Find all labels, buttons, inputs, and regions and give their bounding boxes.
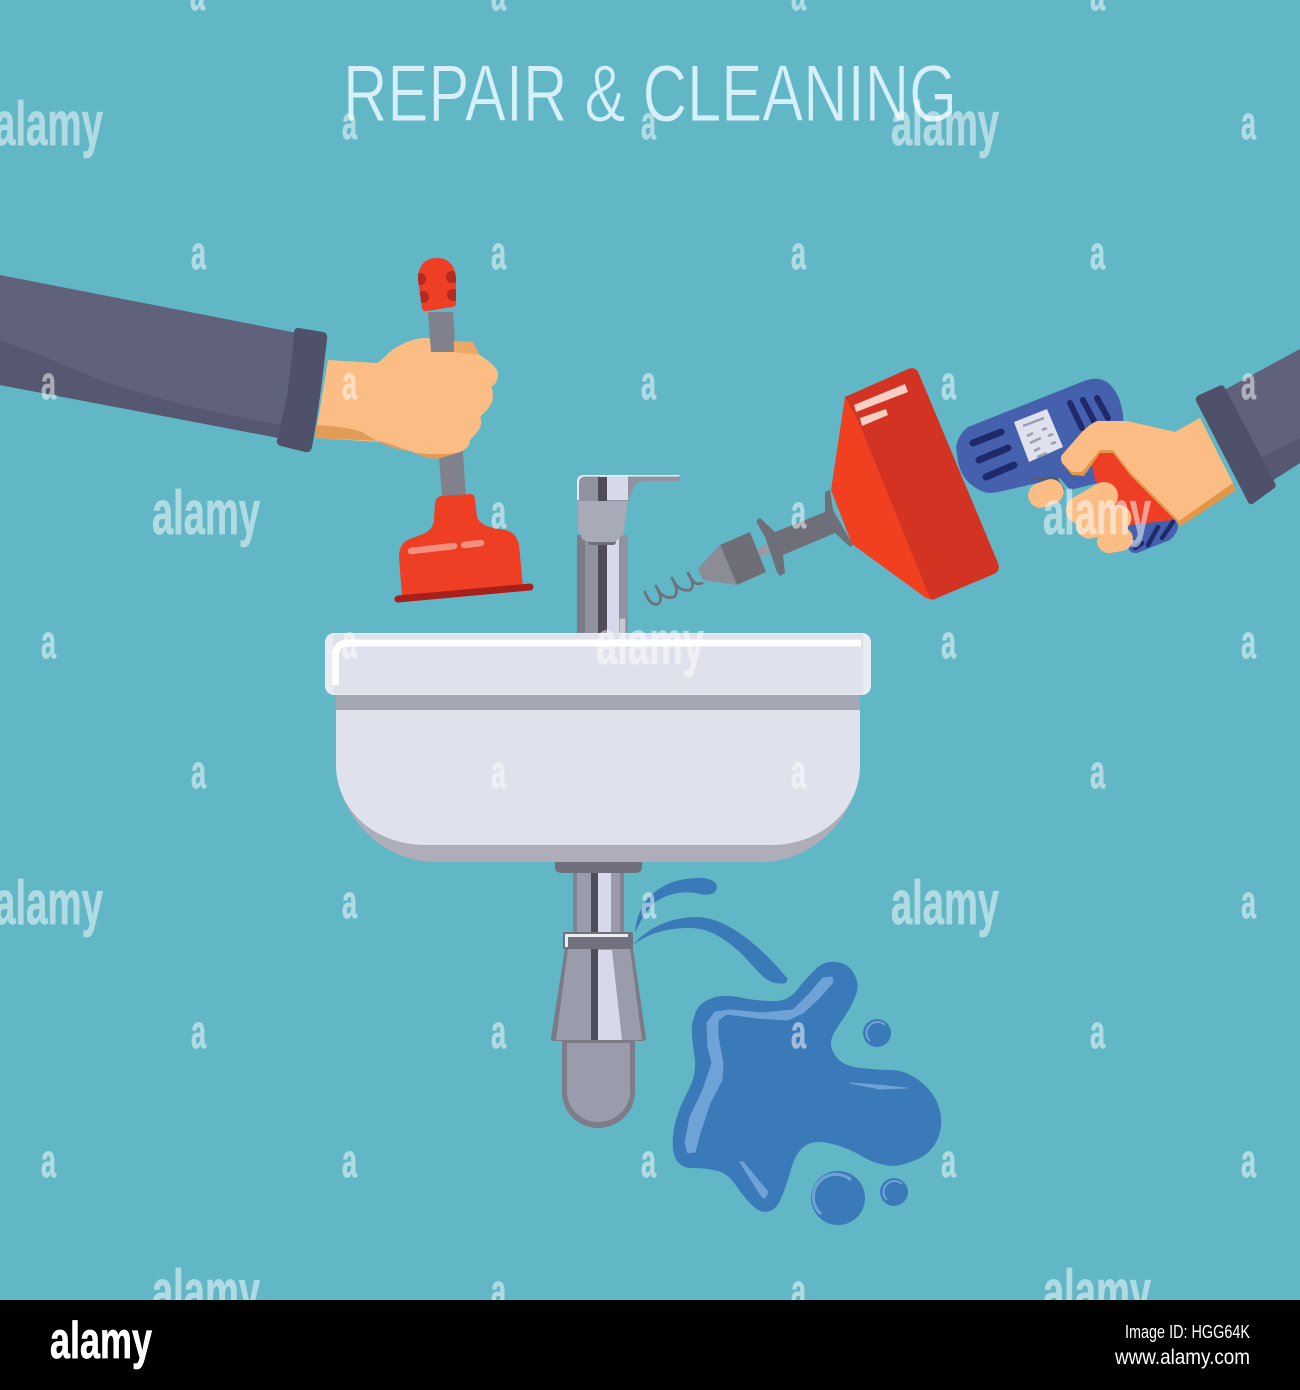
puddle highlights bbox=[685, 977, 907, 1198]
watermarks: a bbox=[641, 1134, 656, 1187]
drill vents bbox=[973, 398, 1108, 477]
watermarks: a bbox=[641, 96, 656, 149]
watermarks: a bbox=[791, 1005, 806, 1058]
watermarks: a bbox=[1241, 1134, 1256, 1187]
drain cable machine bbox=[645, 368, 999, 604]
drain pipe bbox=[573, 873, 624, 933]
watermarks: a bbox=[1090, 226, 1105, 279]
watermarks: a bbox=[491, 226, 506, 279]
right sleeve bbox=[1215, 349, 1300, 485]
watermarks: a bbox=[41, 356, 56, 409]
watermarks: a bbox=[41, 1134, 56, 1187]
watermarks: a bbox=[491, 1264, 506, 1317]
watermarks: a bbox=[941, 1134, 956, 1187]
watermarks: a bbox=[791, 226, 806, 279]
sink bbox=[325, 633, 871, 862]
chuck bbox=[698, 532, 770, 585]
drain cup bbox=[562, 1040, 635, 1128]
watermarks: a bbox=[1241, 96, 1256, 149]
faucet stem bbox=[577, 535, 628, 637]
faucet bbox=[577, 475, 680, 637]
lower jet bbox=[633, 917, 787, 984]
watermarks: a bbox=[491, 485, 506, 538]
plunger cup bbox=[398, 494, 530, 599]
faucet lever and head bbox=[577, 475, 680, 501]
drill label bbox=[1014, 409, 1063, 462]
watermarks: alamy bbox=[596, 609, 704, 678]
watermarks: a bbox=[1241, 875, 1256, 928]
image id: Image ID: HGG64K bbox=[1125, 1322, 1250, 1342]
sink bowl bbox=[336, 694, 860, 862]
drain flange bbox=[555, 862, 642, 873]
drill body bbox=[956, 379, 1124, 493]
watermarks: a bbox=[1090, 1005, 1105, 1058]
watermarks: a bbox=[1090, 745, 1105, 798]
red drum side bbox=[831, 397, 932, 600]
drill and right hand bbox=[956, 349, 1300, 555]
watermarks: a bbox=[641, 356, 656, 409]
watermarks: a bbox=[191, 226, 206, 279]
faucet collar bbox=[578, 501, 628, 545]
red drum front bbox=[845, 368, 999, 600]
watermarks: alamy bbox=[1043, 479, 1151, 548]
watermarks: a bbox=[791, 1264, 806, 1317]
watermarks: alamy bbox=[891, 90, 999, 159]
right hand bbox=[1025, 418, 1236, 555]
spindle bbox=[757, 490, 853, 576]
watermarks: a bbox=[41, 615, 56, 668]
drain collar bbox=[563, 932, 633, 949]
coil spring bbox=[645, 573, 702, 604]
watermarks: a bbox=[941, 615, 956, 668]
puddle bbox=[673, 962, 941, 1212]
drain cone bbox=[551, 948, 646, 1041]
plunger handle grip bbox=[418, 258, 456, 312]
watermarks: alamy bbox=[891, 869, 999, 938]
trigger bbox=[1030, 477, 1065, 490]
footer logo: alamy bbox=[50, 1312, 152, 1370]
hand bbox=[315, 312, 498, 459]
red grip bbox=[1092, 450, 1177, 525]
red drum labels bbox=[854, 384, 908, 426]
bubble large bbox=[811, 1171, 865, 1225]
right cuff bbox=[1196, 385, 1276, 504]
bubble small top bbox=[863, 1019, 891, 1047]
water leak bbox=[633, 878, 941, 1225]
watermarks: a bbox=[342, 1134, 357, 1187]
watermarks: alamy bbox=[152, 479, 260, 548]
watermarks: a bbox=[791, 745, 806, 798]
watermarks: a bbox=[191, 1005, 206, 1058]
sink rim bbox=[325, 633, 871, 695]
title: REPAIR & CLEANING bbox=[343, 49, 957, 139]
watermarks: a bbox=[491, 1005, 506, 1058]
watermarks: a bbox=[641, 875, 656, 928]
sleeve bbox=[0, 275, 297, 438]
website: www.alamy.com bbox=[1114, 1346, 1250, 1369]
watermarks: a bbox=[1241, 615, 1256, 668]
watermarks: a bbox=[342, 615, 357, 668]
watermarks: alamy bbox=[152, 1258, 260, 1327]
drain trap bbox=[551, 862, 646, 1128]
plunger stick back bbox=[428, 312, 466, 497]
watermarks: a bbox=[342, 875, 357, 928]
watermarks: a bbox=[191, 745, 206, 798]
footer bar bbox=[0, 1300, 1300, 1390]
fingers bbox=[1025, 476, 1135, 555]
watermarks: a bbox=[941, 356, 956, 409]
watermarks: alamy bbox=[1043, 1258, 1151, 1327]
bubble small right bbox=[880, 1178, 908, 1206]
watermarks: a bbox=[342, 356, 357, 409]
watermarks: a bbox=[1241, 356, 1256, 409]
watermarks: a bbox=[342, 96, 357, 149]
watermarks: a bbox=[791, 485, 806, 538]
cuff bbox=[277, 328, 327, 452]
upper jet bbox=[635, 878, 717, 933]
drill grip end bbox=[1128, 515, 1178, 553]
watermarks: a bbox=[491, 745, 506, 798]
left arm holding plunger bbox=[0, 258, 530, 599]
